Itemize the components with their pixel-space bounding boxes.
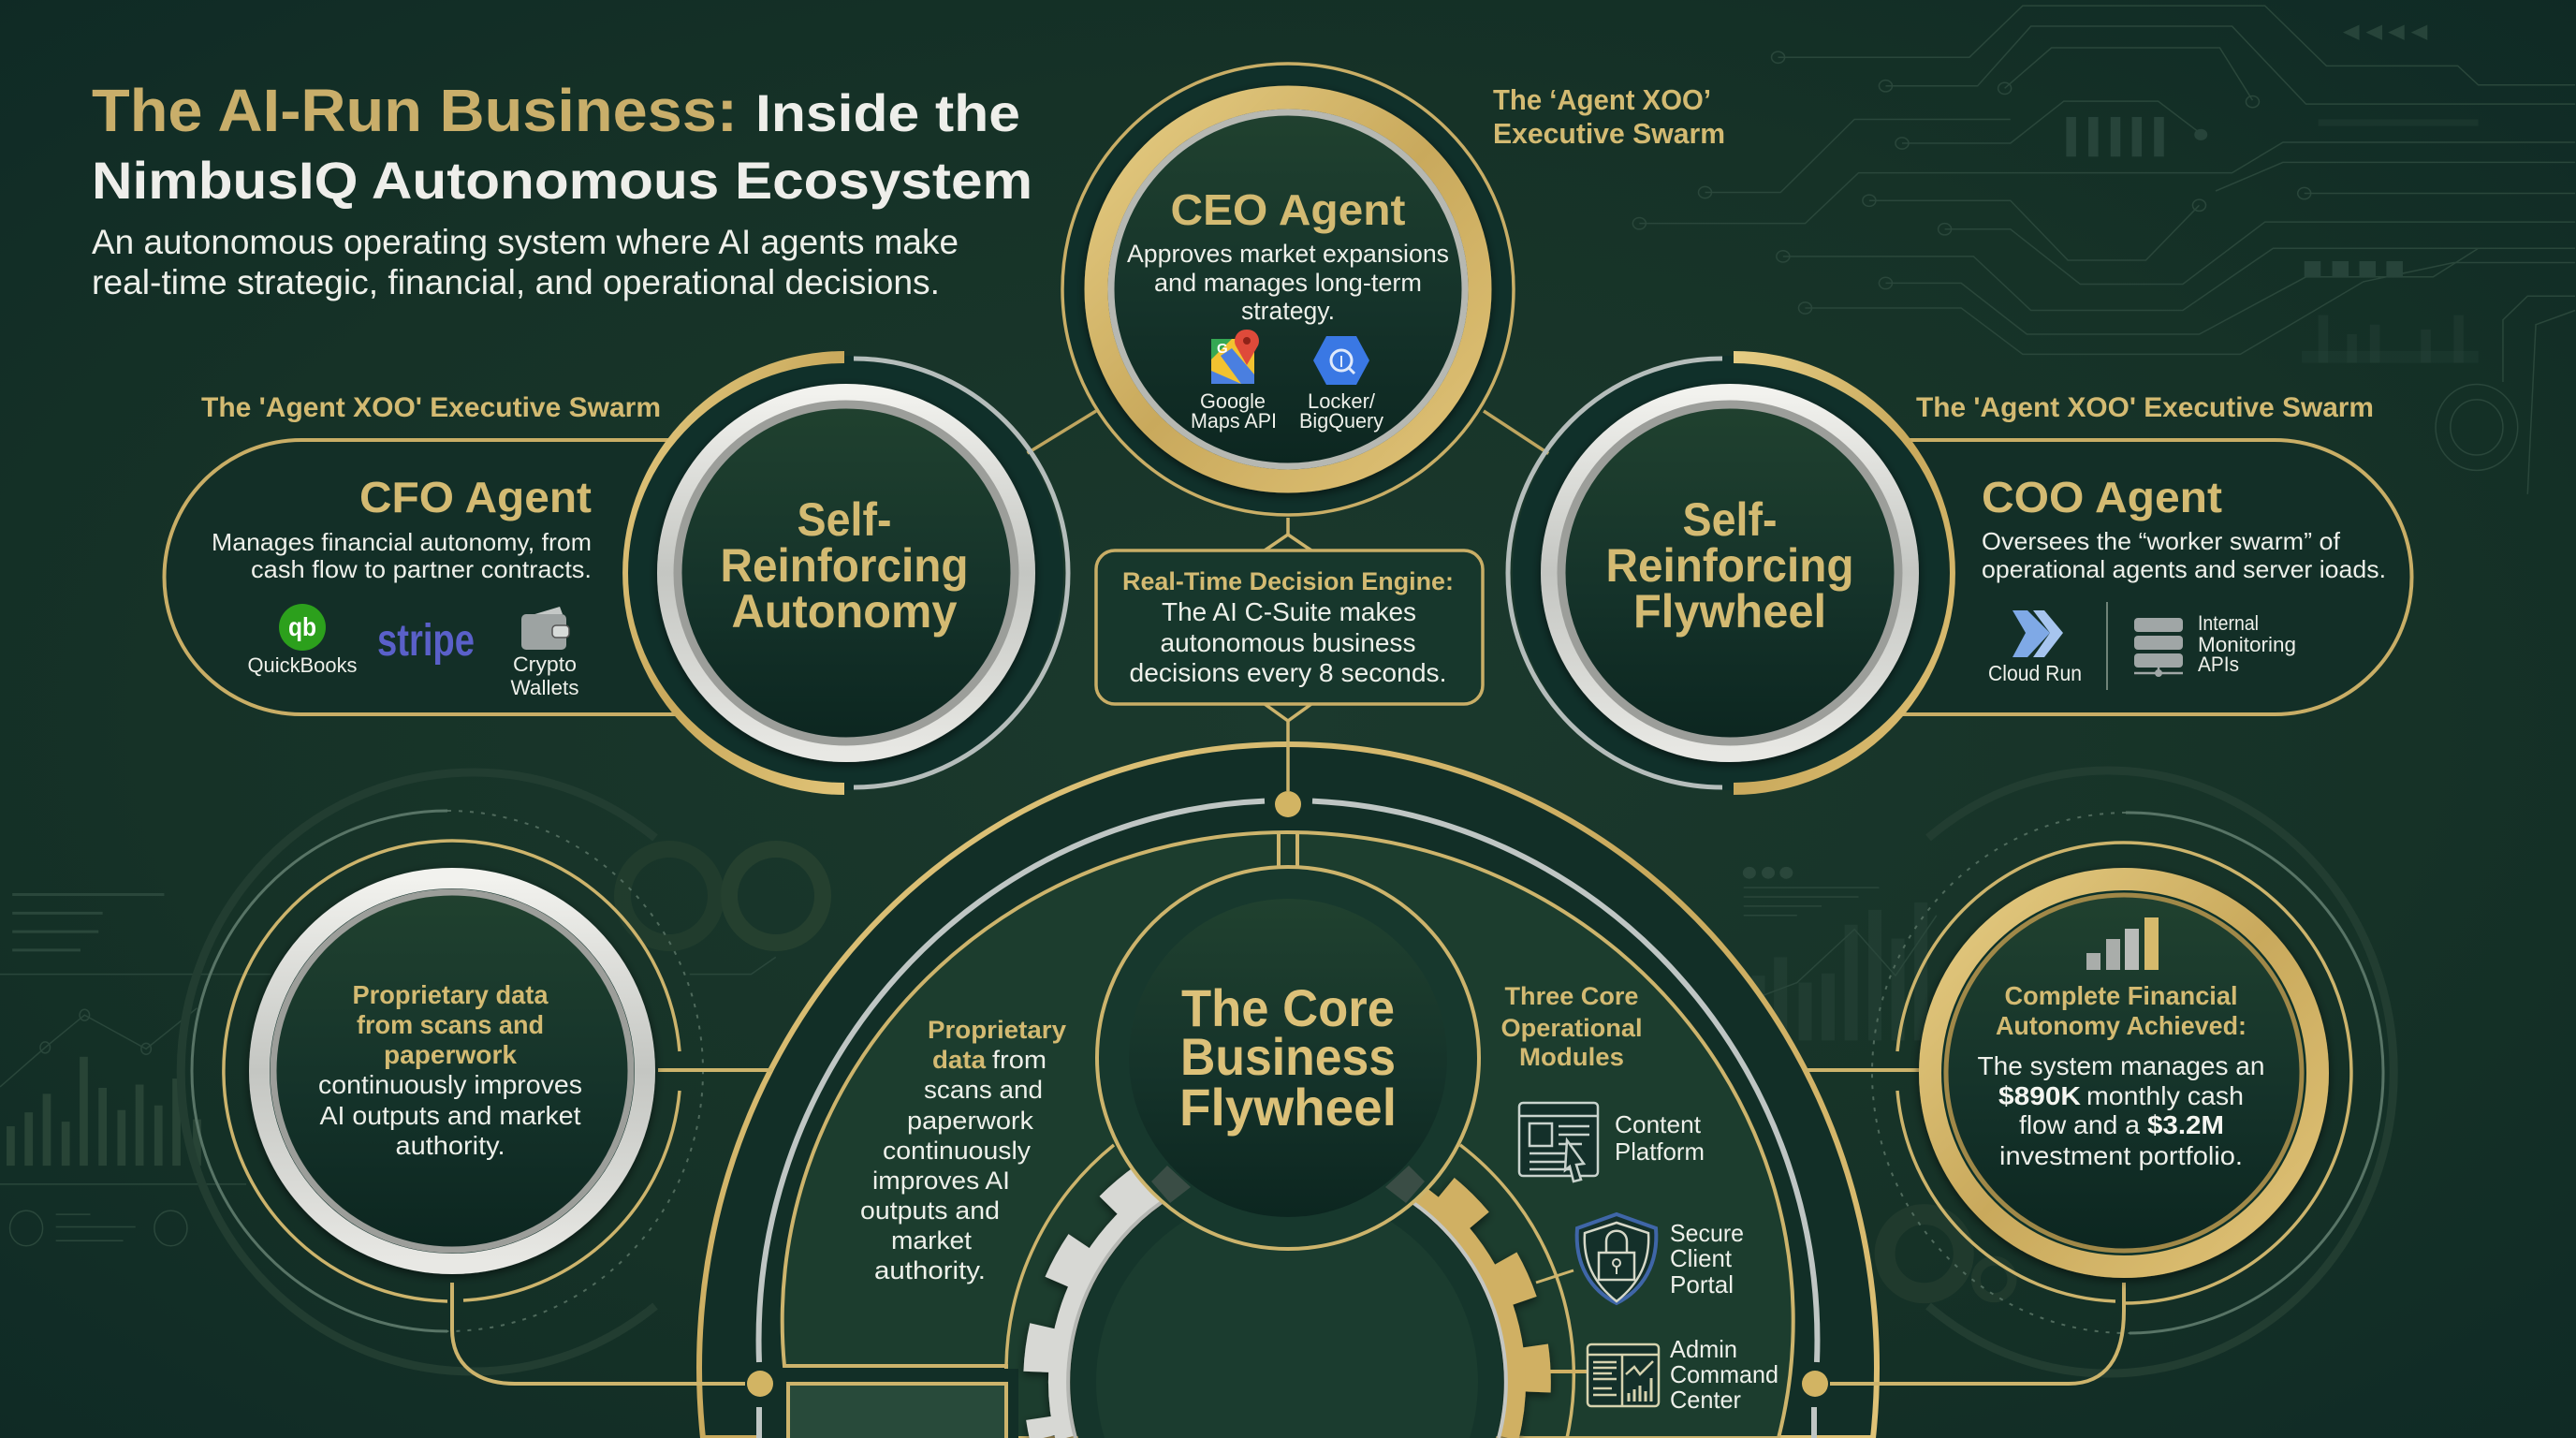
decision engine heading: Real-Time Decision Engine: bbox=[1122, 567, 1454, 595]
three core modules heading: Modules bbox=[1519, 1043, 1624, 1071]
module label: Portal bbox=[1670, 1270, 1734, 1299]
divider bbox=[2106, 602, 2108, 690]
circle body text: authority. bbox=[395, 1131, 505, 1160]
module label: Platform bbox=[1615, 1137, 1705, 1166]
circle body text: The system manages an bbox=[1977, 1051, 2265, 1080]
proprietary data text in flywheel bbox=[860, 1016, 1066, 1284]
CEO description: strategy. bbox=[1241, 297, 1335, 325]
panel: decision engine bbox=[1096, 550, 1483, 704]
COO description: operational agents and server ioads. bbox=[1982, 555, 2386, 583]
three core modules heading: Three Core bbox=[1505, 982, 1638, 1010]
core business flywheel circle bbox=[1097, 867, 1479, 1249]
connector lines bbox=[452, 1070, 772, 1384]
proprietary data text in flywheel: authority. bbox=[874, 1256, 986, 1284]
decision engine text: autonomous business bbox=[1161, 628, 1415, 657]
gear hub bbox=[1071, 1166, 1503, 1438]
proprietary data text in flywheel: improves AI bbox=[872, 1167, 1010, 1195]
icon: google maps bbox=[1211, 330, 1259, 384]
CEO heading: CEO Agent bbox=[1170, 185, 1406, 234]
CFO description bbox=[212, 528, 592, 583]
icon: bigquery hexagon bbox=[1313, 336, 1369, 385]
proprietary data text in flywheel: Proprietary bbox=[928, 1016, 1066, 1044]
bigquery label: Locker/ bbox=[1308, 389, 1376, 413]
monitoring apis label: APIs bbox=[2198, 653, 2239, 676]
bigquery label: BigQuery bbox=[1299, 409, 1383, 433]
COO description bbox=[1982, 527, 2386, 583]
icon: servers bbox=[2134, 618, 2183, 677]
icon: google maps: G bbox=[1217, 341, 1228, 357]
proprietary data text in flywheel: scans and bbox=[924, 1076, 1043, 1104]
decision engine text: decisions every 8 seconds. bbox=[1129, 658, 1447, 687]
monitoring apis label: Monitoring bbox=[2198, 633, 2296, 656]
background chart left bbox=[0, 895, 776, 1246]
ring title: Reinforcing bbox=[721, 539, 968, 592]
module label: Secure bbox=[1670, 1219, 1744, 1247]
module label: Center bbox=[1670, 1386, 1741, 1414]
module label: Content bbox=[1615, 1110, 1702, 1138]
module label bbox=[1670, 1335, 1778, 1414]
outer gold arc bbox=[699, 744, 1877, 1438]
ring title: Self- bbox=[1683, 493, 1777, 546]
gear arc lines bbox=[1006, 1145, 1573, 1438]
proprietary data text in flywheel: continuously bbox=[883, 1137, 1032, 1165]
circle body text: continuously improves bbox=[318, 1070, 582, 1099]
circle body text: investment portfolio. bbox=[1999, 1141, 2243, 1170]
background faded rings bbox=[622, 849, 823, 943]
background chart right bbox=[1743, 867, 2012, 1298]
circle highlight text bbox=[352, 980, 549, 1069]
connector decision engine to core bbox=[1265, 704, 1311, 791]
google maps label: Google bbox=[1200, 389, 1266, 413]
core title: The Core bbox=[1181, 978, 1395, 1037]
decision engine text bbox=[1129, 597, 1447, 687]
icon: shield bbox=[1577, 1214, 1656, 1303]
CFO description: cash flow to partner contracts. bbox=[251, 555, 592, 583]
module: admin command center bbox=[1548, 1335, 1778, 1414]
COO heading: COO Agent bbox=[1982, 473, 2222, 521]
label: top right swarm: Executive Swarm bbox=[1493, 117, 1725, 150]
google maps label bbox=[1191, 389, 1277, 433]
gold ring arcs bbox=[224, 841, 680, 1301]
silver outer arc bbox=[1508, 359, 1722, 787]
module label bbox=[1615, 1110, 1705, 1166]
circle body text: monthly cash bbox=[2086, 1081, 2244, 1110]
title: NimbusIQ Autonomous Ecosystem bbox=[92, 151, 1032, 210]
icon: dashboard bbox=[1588, 1344, 1659, 1406]
monitoring apis label bbox=[2198, 611, 2296, 676]
icon: bar chart bbox=[2086, 917, 2159, 970]
gold outer arc bbox=[622, 351, 844, 795]
wallet label bbox=[511, 653, 578, 699]
icon: cloud run bbox=[2012, 610, 2063, 657]
subtitle bbox=[92, 223, 959, 301]
top junction dot and connectors bbox=[1275, 791, 1301, 871]
ring title bbox=[1606, 493, 1853, 638]
gear bbox=[1036, 1131, 1538, 1438]
icon: wallet bbox=[521, 607, 569, 650]
core title bbox=[1179, 978, 1397, 1137]
module label bbox=[1670, 1219, 1744, 1299]
gear gold half bbox=[1287, 1131, 1538, 1438]
subtitle: An autonomous operating system where AI agents make bbox=[92, 223, 959, 261]
gear joints bbox=[1151, 1166, 1425, 1203]
title: The AI-Run Business: bbox=[92, 77, 738, 144]
title bbox=[92, 77, 1032, 210]
icon: quickbooks bbox=[279, 604, 326, 651]
connector line bbox=[1548, 1370, 1587, 1373]
proprietary data text in flywheel: from bbox=[992, 1046, 1046, 1074]
google maps label: Maps API bbox=[1191, 409, 1277, 433]
panel: financial autonomy circle bbox=[1806, 770, 2393, 1384]
gold ring arcs bbox=[1897, 843, 2351, 1303]
subtitle: real-time strategic, financial, and operational decisions. bbox=[92, 263, 940, 301]
proprietary data text in flywheel: market bbox=[891, 1226, 973, 1255]
three core modules heading bbox=[1501, 982, 1642, 1071]
circle highlight text: from scans and bbox=[357, 1010, 544, 1039]
title: Inside the bbox=[755, 83, 1020, 142]
proprietary data text in flywheel: data bbox=[932, 1046, 987, 1074]
panel: CEO agent bbox=[1062, 64, 1514, 515]
circle highlight text: Proprietary data bbox=[352, 980, 549, 1009]
ring title bbox=[721, 493, 968, 638]
module: secure client portal bbox=[1536, 1214, 1744, 1303]
circle body text: $890K bbox=[1998, 1081, 2081, 1110]
COO description: Oversees the “worker swarm” of bbox=[1982, 527, 2341, 555]
panel: COO agent bbox=[1891, 440, 2411, 714]
wallet label: Wallets bbox=[511, 676, 578, 699]
silver arcs bbox=[759, 801, 1817, 1438]
circle highlight text: paperwork bbox=[384, 1040, 517, 1069]
circle body text: flow and a bbox=[2019, 1110, 2140, 1139]
core title: Business bbox=[1180, 1027, 1396, 1086]
connector lines between rings bbox=[1026, 411, 1549, 454]
circle body text: AI outputs and market bbox=[320, 1101, 581, 1130]
ring title: Autonomy bbox=[732, 585, 958, 638]
icon: stripe: stripe bbox=[377, 616, 475, 666]
icon: quickbooks: qb bbox=[288, 612, 316, 641]
background circuit pattern bbox=[1632, 6, 2575, 494]
CEO description bbox=[1127, 240, 1449, 325]
panel: CFO agent bbox=[164, 440, 693, 714]
circle body text: $3.2M bbox=[2147, 1110, 2224, 1139]
silver outer arc bbox=[854, 359, 1068, 787]
core title: Flywheel bbox=[1179, 1078, 1397, 1137]
label: left swarm: The 'Agent XOO' Executive Swarm bbox=[201, 392, 661, 423]
side junction dots bbox=[747, 1371, 1828, 1397]
label: top right swarm: The ‘Agent XOO’ bbox=[1493, 83, 1711, 116]
gold outer arc bbox=[1734, 351, 1955, 795]
cloud run label: Cloud Run bbox=[1988, 661, 2082, 685]
proprietary data text in flywheel: outputs and bbox=[860, 1196, 1000, 1225]
connector lines bbox=[1806, 1070, 2124, 1384]
ring title: Flywheel bbox=[1633, 585, 1826, 638]
inner flywheel panel bbox=[783, 832, 1793, 1438]
circle body text bbox=[318, 1070, 582, 1160]
ring: self-reinforcing autonomy bbox=[622, 351, 1068, 795]
CEO description: and manages long-term bbox=[1154, 269, 1422, 297]
proprietary data text in flywheel: paperwork bbox=[907, 1107, 1034, 1135]
circle heading bbox=[1996, 981, 2247, 1040]
decision engine text: The AI C-Suite makes bbox=[1162, 597, 1416, 626]
circle heading: Autonomy Achieved: bbox=[1996, 1011, 2247, 1040]
lower left data panel bbox=[756, 1369, 1018, 1438]
circle body text bbox=[1977, 1051, 2265, 1170]
connector lines bbox=[1536, 1270, 1573, 1283]
three core modules heading: Operational bbox=[1501, 1014, 1642, 1042]
module: content platform bbox=[1519, 1103, 1705, 1181]
circle heading: Complete Financial bbox=[2005, 981, 2237, 1010]
ring title: Self- bbox=[798, 493, 891, 546]
panel: proprietary data circle bbox=[181, 772, 772, 1384]
quickbooks label: QuickBooks bbox=[247, 653, 358, 677]
module label: Command bbox=[1670, 1360, 1778, 1388]
ring title: Reinforcing bbox=[1606, 539, 1853, 592]
bigquery label bbox=[1299, 389, 1383, 433]
label: top right swarm bbox=[1493, 83, 1725, 150]
gear silver half bbox=[1036, 1131, 1287, 1438]
wallet label: Crypto bbox=[513, 653, 577, 676]
icon: browser window bbox=[1519, 1103, 1598, 1181]
connector CEO to decision engine bbox=[1265, 518, 1311, 550]
CFO description: Manages financial autonomy, from bbox=[212, 528, 592, 556]
label: right swarm: The 'Agent XOO' Executive Swarm bbox=[1916, 392, 2374, 423]
module label: Admin bbox=[1670, 1335, 1737, 1363]
monitoring apis label: Internal bbox=[2198, 611, 2259, 635]
CFO heading: CFO Agent bbox=[359, 473, 592, 521]
module label: Client bbox=[1670, 1244, 1733, 1272]
CEO description: Approves market expansions bbox=[1127, 240, 1449, 268]
ring: self-reinforcing flywheel bbox=[1508, 351, 1955, 795]
